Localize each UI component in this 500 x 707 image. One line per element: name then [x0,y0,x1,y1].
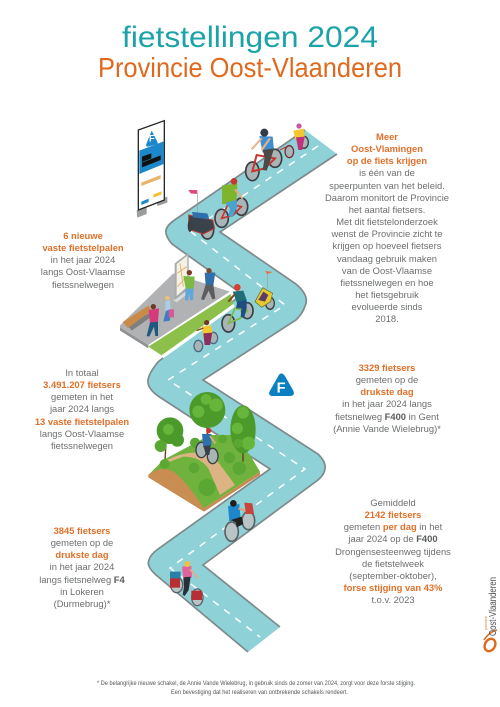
person in blue shirt [201,268,215,300]
logo: provincie Oost-Vlaanderen: provincie [484,616,488,630]
logo: provincie Oost-Vlaanderen: Oost-Vlaanderen [488,577,499,636]
person in green shirt [183,270,195,301]
info plaza with bench and people [120,253,235,358]
text block: 3845 fietsers: langs fietsnelweg F4 [39,574,125,585]
text block: 3329 fietsers: gemeten op de [356,374,418,385]
park island with trees [148,392,260,512]
text block: 2142 fietsers: Gemiddeld [370,497,416,508]
child cyclist in yellow [280,123,308,158]
tree left [155,417,184,460]
text block: 3845 fietsers: gemeten op de [51,537,113,548]
map board [173,253,192,302]
text block: 6 nieuwe vaste fietstelpalen [41,230,125,290]
text block: 3.491.207 fietsers: jaar 2024 langs [50,403,114,414]
logo: provincie Oost-Vlaanderen [482,577,499,653]
text block: Meer Oost-Vlamingen: evolueerde sinds [352,301,422,312]
text block: Meer Oost-Vlamingen: op de fiets krijgen [347,155,427,166]
text block: Meer Oost-Vlamingen: is één van de [359,167,415,178]
text block: 3.491.207 fietsers: In totaal [65,367,99,378]
title [98,21,402,83]
text block: 6 nieuwe vaste fietstelpalen: langs Oost-Vlaamse [41,266,125,277]
text block: 3845 fietsers: in het jaar 2024 [50,561,114,572]
winding cycle path [148,130,337,652]
icon: fiets totem sign [137,121,167,218]
person in pink shirt [147,304,159,337]
text block: 2142 fietsers: Drongensesteenweg tijdens [335,546,451,557]
cyclist with blue shirt [246,129,282,181]
text block: 6 nieuwe vaste fietstelpalen: in het jaar 2024 [51,254,115,265]
text block: 3329 fietsers: drukste dag [360,386,414,397]
text block: 3845 fietsers: (Durmebrug)* [54,598,110,609]
text block: Meer Oost-Vlamingen: 2018. [375,313,399,324]
text block: 2142 fietsers: 2142 fietsers [365,509,421,520]
text block: Meer Oost-Vlamingen: het aantal fietsers. [349,204,425,215]
child cyclist on blue bike [194,320,218,352]
tree middle [189,392,225,435]
cyclist in green shirt [215,178,248,227]
text block: Meer Oost-Vlamingen: Daarom monitort de Provincie [325,192,449,203]
text block: 3329 fietsers: in het jaar 2024 langs [342,398,432,409]
text block: Meer Oost-Vlamingen: Oost-Vlamingen [351,143,423,154]
text block: 2142 fietsers: gemeten per dag in het [344,521,442,532]
text block: 2142 fietsers: forse stijging van 43% [344,582,442,593]
text block: 3845 fietsers: 3845 fietsers [54,525,110,536]
text block: 3.491.207 fietsers: gemeten in het [51,391,113,402]
text block: 3329 fietsers: fietsnelweg F400 in Gent [335,411,439,422]
title: fietstellingen 2024 [122,21,378,54]
text block: 3329 fietsers: 3329 fietsers [359,362,415,373]
text block: Meer Oost-Vlamingen: wenst de Provincie zicht te [332,228,442,239]
text block: 3845 fietsers [39,525,125,609]
text block: 3.491.207 fietsers: langs Oost-Vlaamse [40,428,124,439]
text block: Meer Oost-Vlamingen: vandaag gebruik maken [337,253,437,264]
cyclist in blue shirt with red basket [225,500,255,541]
text block: 3845 fietsers: in Lokeren [60,586,104,597]
text block: 2142 fietsers: t.o.v. 2023 [371,594,415,605]
text block: Meer Oost-Vlamingen: krijgen op hoeveel fietsers [333,240,441,251]
cyclist on the park trail [196,428,218,464]
text block: 3.491.207 fietsers: fietssnelwegen [51,440,113,451]
bushes [160,435,246,496]
text block: 6 nieuwe vaste fietstelpalen: fietssnelwegen [52,279,114,290]
text block: 2142 fietsers: de fietstelweek [362,558,424,569]
child with pink bag [163,296,174,322]
bench [123,306,152,331]
text block: Meer Oost-Vlamingen: het fietsgebruik [355,289,419,300]
text block: Meer Oost-Vlamingen: van de Oost-Vlaamse [342,265,432,276]
footnote: Een bevestiging dat het realiseren van ontbrekende schakels rendeert. [171,689,348,696]
touring cyclist in pink [170,561,203,606]
text block: Meer Oost-Vlamingen: Meer [376,131,398,142]
icon: blue F route badge [269,373,294,397]
title: Provincie Oost-Vlaanderen [98,52,402,83]
text block: 6 nieuwe vaste fietstelpalen: vaste fietstelpalen [42,242,124,253]
text block: Meer Oost-Vlamingen [325,131,449,324]
text block: 3329 fietsers: (Annie Vande Wielebrug)* [333,423,441,434]
illustrations lower half [148,373,294,606]
text block: 2142 fietsers: (september-oktober), [349,570,437,581]
footnote: * De belangrijke nieuwe schakel, de Annie Vande Wielebrug, in gebruik sinds de zomer van 2024, zorgt voor deze forste stijging. [97,680,415,687]
text block: 3.491.207 fietsers: 3.491.207 fietsers [43,379,121,390]
footnote [97,680,415,696]
cyclist with red helmet and trailer [222,271,274,332]
bike trailer with pink flag [188,190,215,239]
text block: 3.491.207 fietsers: 13 vaste fietstelpalen [35,416,129,427]
text block: 3.491.207 fietsers [35,367,129,451]
text block: Meer Oost-Vlamingen: Met dit fietstelonderzoek [336,216,438,227]
text block: 3329 fietsers [333,362,441,434]
illustrations upper half [120,121,308,358]
tree right [230,405,256,462]
icon: fiets totem sign: F [149,134,155,144]
text block: Meer Oost-Vlamingen: fietssnelwegen en hoe [340,277,434,288]
text block: 6 nieuwe vaste fietstelpalen: 6 nieuwe [63,230,103,241]
text block: Meer Oost-Vlamingen: speerpunten van het beleid. [329,180,445,191]
icon: blue F route badge: F [277,381,286,397]
text block: 2142 fietsers [335,497,451,605]
text block: 3845 fietsers: drukste dag [55,549,109,560]
text block: 2142 fietsers: jaar 2024 op de F400 [348,533,438,544]
